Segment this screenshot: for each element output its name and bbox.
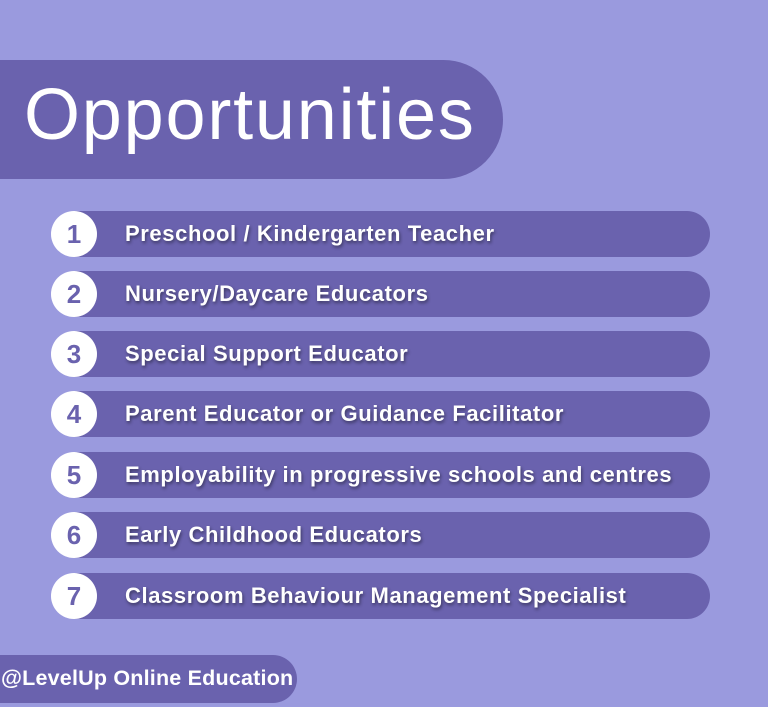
item 5 <box>51 452 710 498</box>
item 4: Parent Educator or Guidance Facilitator <box>125 401 564 426</box>
item 1 <box>51 211 710 257</box>
item 7: 7 <box>67 581 81 611</box>
item 7 <box>51 573 710 619</box>
item 1: Preschool / Kindergarten Teacher <box>125 221 495 246</box>
footer credit <box>0 655 297 703</box>
item 3: 3 <box>67 339 81 369</box>
item 1: 1 <box>67 219 81 249</box>
title <box>0 60 503 179</box>
item 2: 2 <box>67 279 81 309</box>
item 6: 6 <box>67 520 81 550</box>
item 3: Special Support Educator <box>125 341 408 366</box>
item 7: Classroom Behaviour Management Specialist <box>125 583 626 608</box>
item 3 <box>51 331 710 377</box>
footer credit: @LevelUp Online Education <box>1 666 293 690</box>
item 6 <box>51 512 710 558</box>
item 5: 5 <box>67 460 81 490</box>
title: Opportunities <box>24 75 476 155</box>
item 4 <box>51 391 710 437</box>
item 2 <box>51 271 710 317</box>
item 4: 4 <box>67 399 81 429</box>
item 2: Nursery/Daycare Educators <box>125 281 429 306</box>
item 5: Employability in progressive schools and centres <box>125 462 672 487</box>
item 6: Early Childhood Educators <box>125 522 422 547</box>
